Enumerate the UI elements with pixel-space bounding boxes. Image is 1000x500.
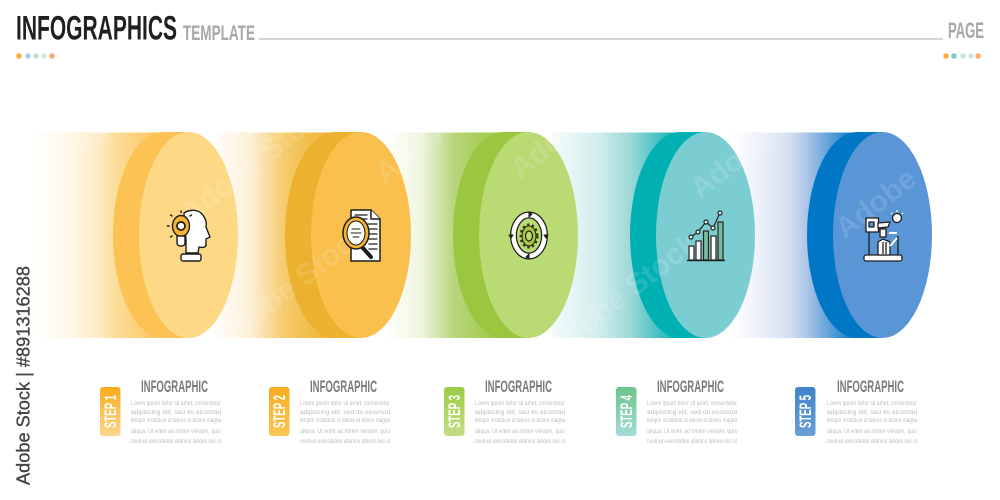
icon: document with magnifier <box>343 210 380 261</box>
step 1 body text: tempor incididunt ut labore et dolore magna <box>131 417 221 424</box>
step 1 column <box>100 377 222 445</box>
icon: gear with circular arrows <box>509 212 548 259</box>
watermark: Adobe Stock <box>369 51 534 191</box>
title: INFOGRAPHICS <box>16 10 177 48</box>
step 3 badge: STEP 3 <box>446 395 464 428</box>
step 1 badge: STEP 1 <box>102 395 120 428</box>
icon: presenter on laptop <box>864 210 903 261</box>
step 2 body text: Lorem ipsum dolor sit amet, consectetur <box>300 400 391 407</box>
step 4 body text: Lorem ipsum dolor sit amet, consectetur <box>647 400 738 407</box>
disc 5 <box>807 132 932 338</box>
step 2 body text <box>300 400 391 445</box>
disc 2 <box>285 132 411 338</box>
step 1 body text: Lorem ipsum dolor sit amet, consectetur <box>131 400 222 407</box>
step 5 badge: STEP 5 <box>797 395 815 428</box>
step 5 body text: adipiscing elit, sed do eiusmod <box>827 409 917 416</box>
step 2 heading: INFOGRAPHIC <box>310 377 377 396</box>
step 3 column <box>444 377 566 445</box>
stock id side label: Adobe Stock | #891316288 <box>14 266 34 485</box>
step 5 body text: nostrud exercitation ullamco laboris nisi ut <box>827 438 917 445</box>
step 1 body text: nostrud exercitation ullamco laboris nisi ut <box>131 438 221 445</box>
step 2 column <box>269 377 391 445</box>
disc 3 <box>453 132 578 338</box>
left header dots <box>16 53 55 59</box>
step 3 body text <box>475 400 566 445</box>
step 5 body text: aliqua. Ut enim ad minim veniam, quis <box>827 428 918 435</box>
step 5 heading: INFOGRAPHIC <box>837 377 904 396</box>
watermark: Adobe Stock <box>209 216 374 356</box>
step 3 body text: tempor incididunt ut labore et dolore magna <box>475 417 565 424</box>
step 2 badge: STEP 2 <box>271 395 289 428</box>
step 3 heading: INFOGRAPHIC <box>485 377 552 396</box>
step 4 body text <box>647 400 738 445</box>
step 2 body text: nostrud exercitation ullamco laboris nisi ut <box>300 438 390 445</box>
step 2 body text: tempor incididunt ut labore et dolore magna <box>300 417 390 424</box>
watermark: Adobe Stock <box>539 226 704 366</box>
disc 4 <box>630 132 755 338</box>
step 2 body text: adipiscing elit, sed do eiusmod <box>300 409 390 416</box>
step 3 body text: nostrud exercitation ullamco laboris nisi ut <box>475 438 565 445</box>
step 4 body text: aliqua. Ut enim ad minim veniam, quis <box>647 428 738 435</box>
watermark <box>34 46 1000 376</box>
step 4 badge: STEP 4 <box>618 395 636 428</box>
step 5 body text <box>827 400 918 445</box>
watermark: Adobe Stock <box>684 66 849 206</box>
gradient trails <box>35 132 857 338</box>
step 5 body text: tempor incididunt ut labore et dolore magna <box>827 417 917 424</box>
title: TEMPLATE <box>183 22 255 45</box>
step 3 body text: adipiscing elit, sed do eiusmod <box>475 409 565 416</box>
step 2 body text: aliqua. Ut enim ad minim veniam, quis <box>300 428 391 435</box>
step 1 body text: aliqua. Ut enim ad minim veniam, quis <box>131 428 222 435</box>
step 4 body text: tempor incididunt ut labore et dolore magna <box>647 417 737 424</box>
step 4 heading: INFOGRAPHIC <box>657 377 724 396</box>
step 5 column <box>795 377 918 445</box>
step 5 body text: Lorem ipsum dolor sit amet, consectetur <box>827 400 918 407</box>
watermark: Adobe Stock <box>34 46 199 186</box>
step 1 heading: INFOGRAPHIC <box>141 377 208 396</box>
watermark: Adobe Stock <box>829 106 994 246</box>
step 3 body text: aliqua. Ut enim ad minim veniam, quis <box>475 428 566 435</box>
step 1 body text: adipiscing elit, sed do eiusmod <box>131 409 221 416</box>
step 4 body text: nostrud exercitation ullamco laboris nisi ut <box>647 438 737 445</box>
watermark: Adobe Stock <box>504 46 669 186</box>
icon: growth bar chart <box>687 211 725 260</box>
step 4 body text: adipiscing elit, sed do eiusmod <box>647 409 737 416</box>
disc 1 <box>113 132 238 338</box>
watermark: Adobe Stock <box>174 91 339 231</box>
right header dots <box>943 53 981 59</box>
icon: head with light bulb <box>168 210 210 261</box>
step 3 body text: Lorem ipsum dolor sit amet, consectetur <box>475 400 566 407</box>
step 4 column <box>616 377 738 445</box>
step 1 body text <box>131 400 222 445</box>
